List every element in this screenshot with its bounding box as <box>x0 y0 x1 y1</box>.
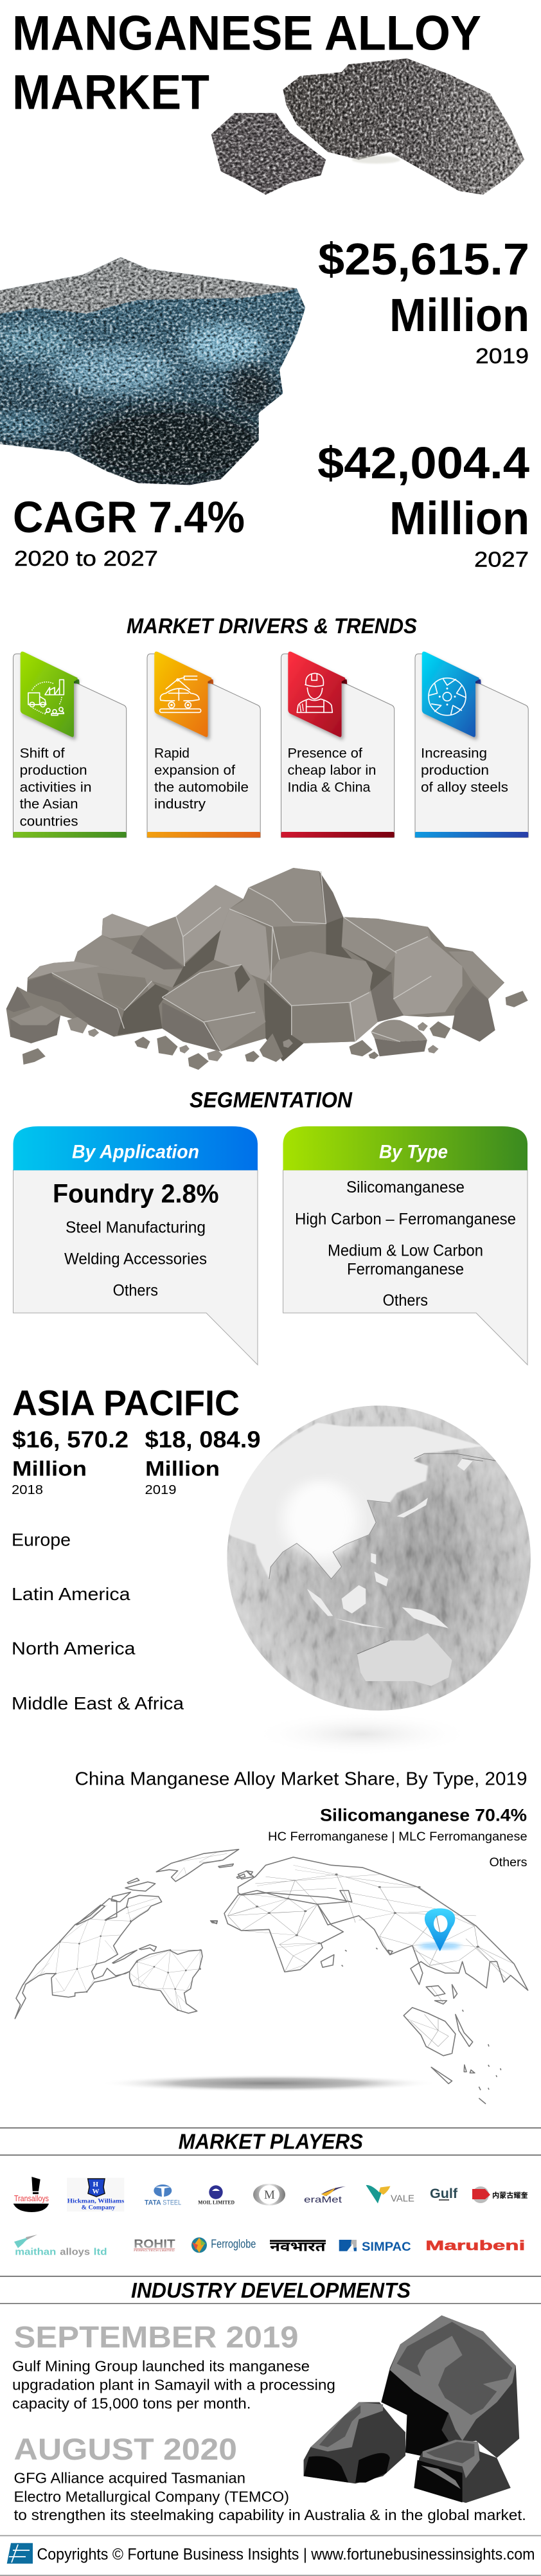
CAGR: 2020 to 2027 <box>14 546 158 570</box>
driver text 4: Increasing <box>421 746 487 761</box>
development: September 2019: capacity of 15,000 tons per month. <box>12 2395 251 2412</box>
type list: Others <box>383 1292 428 1310</box>
application list: Welding Accessories <box>64 1250 207 1268</box>
application list: Foundry 2.8% <box>53 1178 218 1208</box>
driver text 2: the automobile <box>154 780 249 795</box>
title: MARKET <box>12 66 209 120</box>
region list: North America <box>12 1639 136 1659</box>
type list: Ferromanganese <box>347 1261 464 1279</box>
driver text 3: Presence of <box>288 746 362 761</box>
logo: Inner Mongolia company <box>472 2186 528 2203</box>
heading: Asia Pacific with values: Million <box>145 1457 220 1480</box>
logo: Maithan Alloys: ltd <box>94 2247 107 2258</box>
type list: Medium & Low Carbon <box>328 1242 483 1260</box>
logo: Maithan Alloys: maithan <box>15 2247 56 2258</box>
heading: Asia Pacific with values: $16, 570.2 <box>12 1426 129 1452</box>
logo: Transalloys <box>13 2177 49 2212</box>
illustration: dark coal rocks <box>304 2316 519 2503</box>
label: by application: By Application <box>72 1142 199 1162</box>
development: September 2019: upgradation plant in Samayil with a processing <box>12 2376 335 2393</box>
illustration: rock pile <box>6 868 528 1070</box>
region list: Middle East & Africa <box>12 1693 184 1713</box>
driver text 1: the Asian <box>20 797 78 812</box>
logo: Tata Steel: TATA <box>145 2199 161 2206</box>
panel: by type <box>283 1126 528 1365</box>
heading: Asia Pacific with values: $18, 084.9 <box>145 1426 261 1452</box>
logo: Hickman, Williams & Company: Hickman, Williams <box>67 2198 125 2204</box>
logo: Ferroglobe: Ferroglobe <box>211 2238 256 2251</box>
photo: blue-grey manganese rock <box>0 253 310 491</box>
CAGR <box>13 492 245 570</box>
China share list: Silicomanganese 70.4% <box>320 1805 527 1824</box>
market size 2027: Million <box>389 493 529 545</box>
China share list: Others <box>490 1856 527 1869</box>
world map: Americas <box>15 1850 253 2019</box>
heading: Asia Pacific with values: 2019 <box>145 1483 176 1497</box>
panel: driver card 2 <box>147 652 260 838</box>
type list: Silicomanganese <box>346 1178 465 1196</box>
logo: Hickman, Williams & Company <box>67 2178 125 2211</box>
title: MANGANESE ALLOY <box>12 6 481 61</box>
market size 2027 <box>317 438 529 572</box>
photo: grey manganese ore rocks <box>211 59 524 195</box>
logo: Simpac: SIMPAC <box>362 2240 411 2254</box>
driver text 2: Rapid <box>154 746 190 761</box>
logo: Inner Mongolia company: 内蒙古耀奎 <box>492 2190 528 2201</box>
logo: Gulf: Gulf <box>430 2186 458 2201</box>
China share list <box>268 1805 528 1869</box>
type list: High Carbon – Ferromanganese <box>295 1211 516 1229</box>
panel: driver card 1 <box>13 652 127 838</box>
development: August 2020: to strengthen its steelmaking capability in Australia & in the global market. <box>14 2507 526 2523</box>
logo: Vale <box>366 2185 414 2204</box>
driver text 3: cheap labor in <box>288 763 377 778</box>
icon: truck, factory and people <box>28 680 64 716</box>
driver text 2: industry <box>154 797 206 812</box>
driver text 4: production <box>421 763 489 778</box>
chart heading: China market share: China Manganese Alloy Market Share, By Type, 2019 <box>75 1769 527 1789</box>
icon: location pin on China <box>419 1908 461 1951</box>
application list <box>53 1178 218 1299</box>
logo: Hickman, Williams & Company: & Company <box>82 2204 116 2211</box>
development: September 2019 <box>12 2320 335 2412</box>
market size 2027: 2027 <box>474 548 529 572</box>
region list: Europe <box>12 1530 71 1549</box>
footer <box>0 2535 541 2575</box>
heading: Asia Pacific with values: Million <box>12 1457 87 1480</box>
logo: Simpac <box>339 2240 411 2254</box>
market size 2019 <box>318 234 529 368</box>
region list: Latin America <box>12 1584 130 1604</box>
logo: Tata Steel <box>145 2184 181 2206</box>
logo: Maithan Alloys <box>14 2235 107 2258</box>
heading: industry developments: INDUSTRY DEVELOPMENTS <box>131 2278 411 2302</box>
logo: Navbharat: नवभारत <box>270 2239 326 2257</box>
title <box>12 6 481 120</box>
development: August 2020: GFG Alliance acquired Tasmanian <box>14 2470 245 2487</box>
driver text 1: activities in <box>20 780 92 795</box>
development: September 2019: Gulf Mining Group launched its manganese <box>12 2357 310 2374</box>
driver text 4: of alloy steels <box>421 780 508 795</box>
market size 2019: 2019 <box>475 344 529 368</box>
type list <box>295 1178 516 1310</box>
logo: Tata Steel: STEEL <box>163 2199 181 2206</box>
market size 2027: $42,004.4 <box>317 438 529 488</box>
heading: Asia Pacific with values <box>12 1383 261 1497</box>
market size 2019: $25,615.7 <box>318 234 529 284</box>
world map: Europe, Africa and Asia <box>100 1857 528 2104</box>
logo: Rohit Ferrotech: FERRO-TECH LIMITED <box>134 2249 175 2252</box>
development: August 2020 <box>14 2432 526 2523</box>
China share list: HC Ferromanganese | MLC Ferromanganese <box>268 1830 528 1844</box>
icon: worker with hard hat <box>297 673 332 712</box>
icon: Fortune Business Insights logo <box>7 2543 33 2564</box>
driver text 1: countries <box>20 814 78 829</box>
logo: Ferroglobe <box>191 2237 256 2253</box>
development: August 2020: AUGUST 2020 <box>14 2432 237 2466</box>
driver text 3 <box>288 746 377 795</box>
logo: Rohit Ferrotech: ROHIT <box>134 2238 175 2251</box>
label: by type: By Type <box>379 1142 448 1162</box>
application list: Others <box>113 1281 158 1299</box>
driver text 1 <box>20 746 92 829</box>
panel: driver card 4 <box>415 652 528 838</box>
icon: car on assembly line <box>160 676 201 712</box>
market size 2019: Million <box>389 290 529 341</box>
heading: market drivers: MARKET DRIVERS & TRENDS <box>127 614 417 638</box>
driver text 3: India & China <box>288 780 371 795</box>
logo: Eramet: eraMet <box>304 2194 342 2204</box>
heading: market players: MARKET PLAYERS <box>179 2129 363 2153</box>
CAGR: CAGR 7.4% <box>13 492 245 542</box>
development: August 2020: Electro Metallurgical Company (TEMCO) <box>14 2489 289 2505</box>
logo: Hickman, Williams & Company: H <box>93 2181 99 2188</box>
logo: Eramet <box>304 2186 346 2204</box>
logo: Vale: VALE <box>391 2193 414 2204</box>
logo: Hickman, Williams & Company: W <box>93 2188 99 2195</box>
development: September 2019: SEPTEMBER 2019 <box>14 2320 298 2354</box>
driver text 2: expansion of <box>154 763 235 778</box>
illustration: grey globe <box>224 1405 531 1756</box>
logo: MOIL Limited: MOIL LIMITED <box>198 2199 235 2205</box>
heading: Asia Pacific with values: ASIA PACIFIC <box>12 1383 240 1423</box>
panel: by application <box>13 1126 258 1365</box>
icon: alloy wheel <box>429 678 466 716</box>
logo: silver M emblem: M <box>264 2188 275 2202</box>
logo: Maithan Alloys: alloys <box>60 2247 90 2258</box>
panel: driver card 3 <box>281 652 395 838</box>
driver text 1: production <box>20 763 87 778</box>
logo: Marubeni: Marubeni <box>425 2238 525 2253</box>
logo: MOIL Limited <box>198 2185 235 2205</box>
heading: Asia Pacific with values: 2018 <box>12 1483 43 1497</box>
driver text 2 <box>154 746 249 812</box>
region list <box>12 1530 184 1713</box>
logo: silver M emblem <box>253 2184 285 2206</box>
heading: segmentation: SEGMENTATION <box>190 1088 353 1112</box>
application list: Steel Manufacturing <box>66 1218 206 1236</box>
logo: Transalloys: Transalloys <box>14 2193 49 2203</box>
driver text 4 <box>421 746 508 795</box>
driver text 1: Shift of <box>20 746 65 761</box>
